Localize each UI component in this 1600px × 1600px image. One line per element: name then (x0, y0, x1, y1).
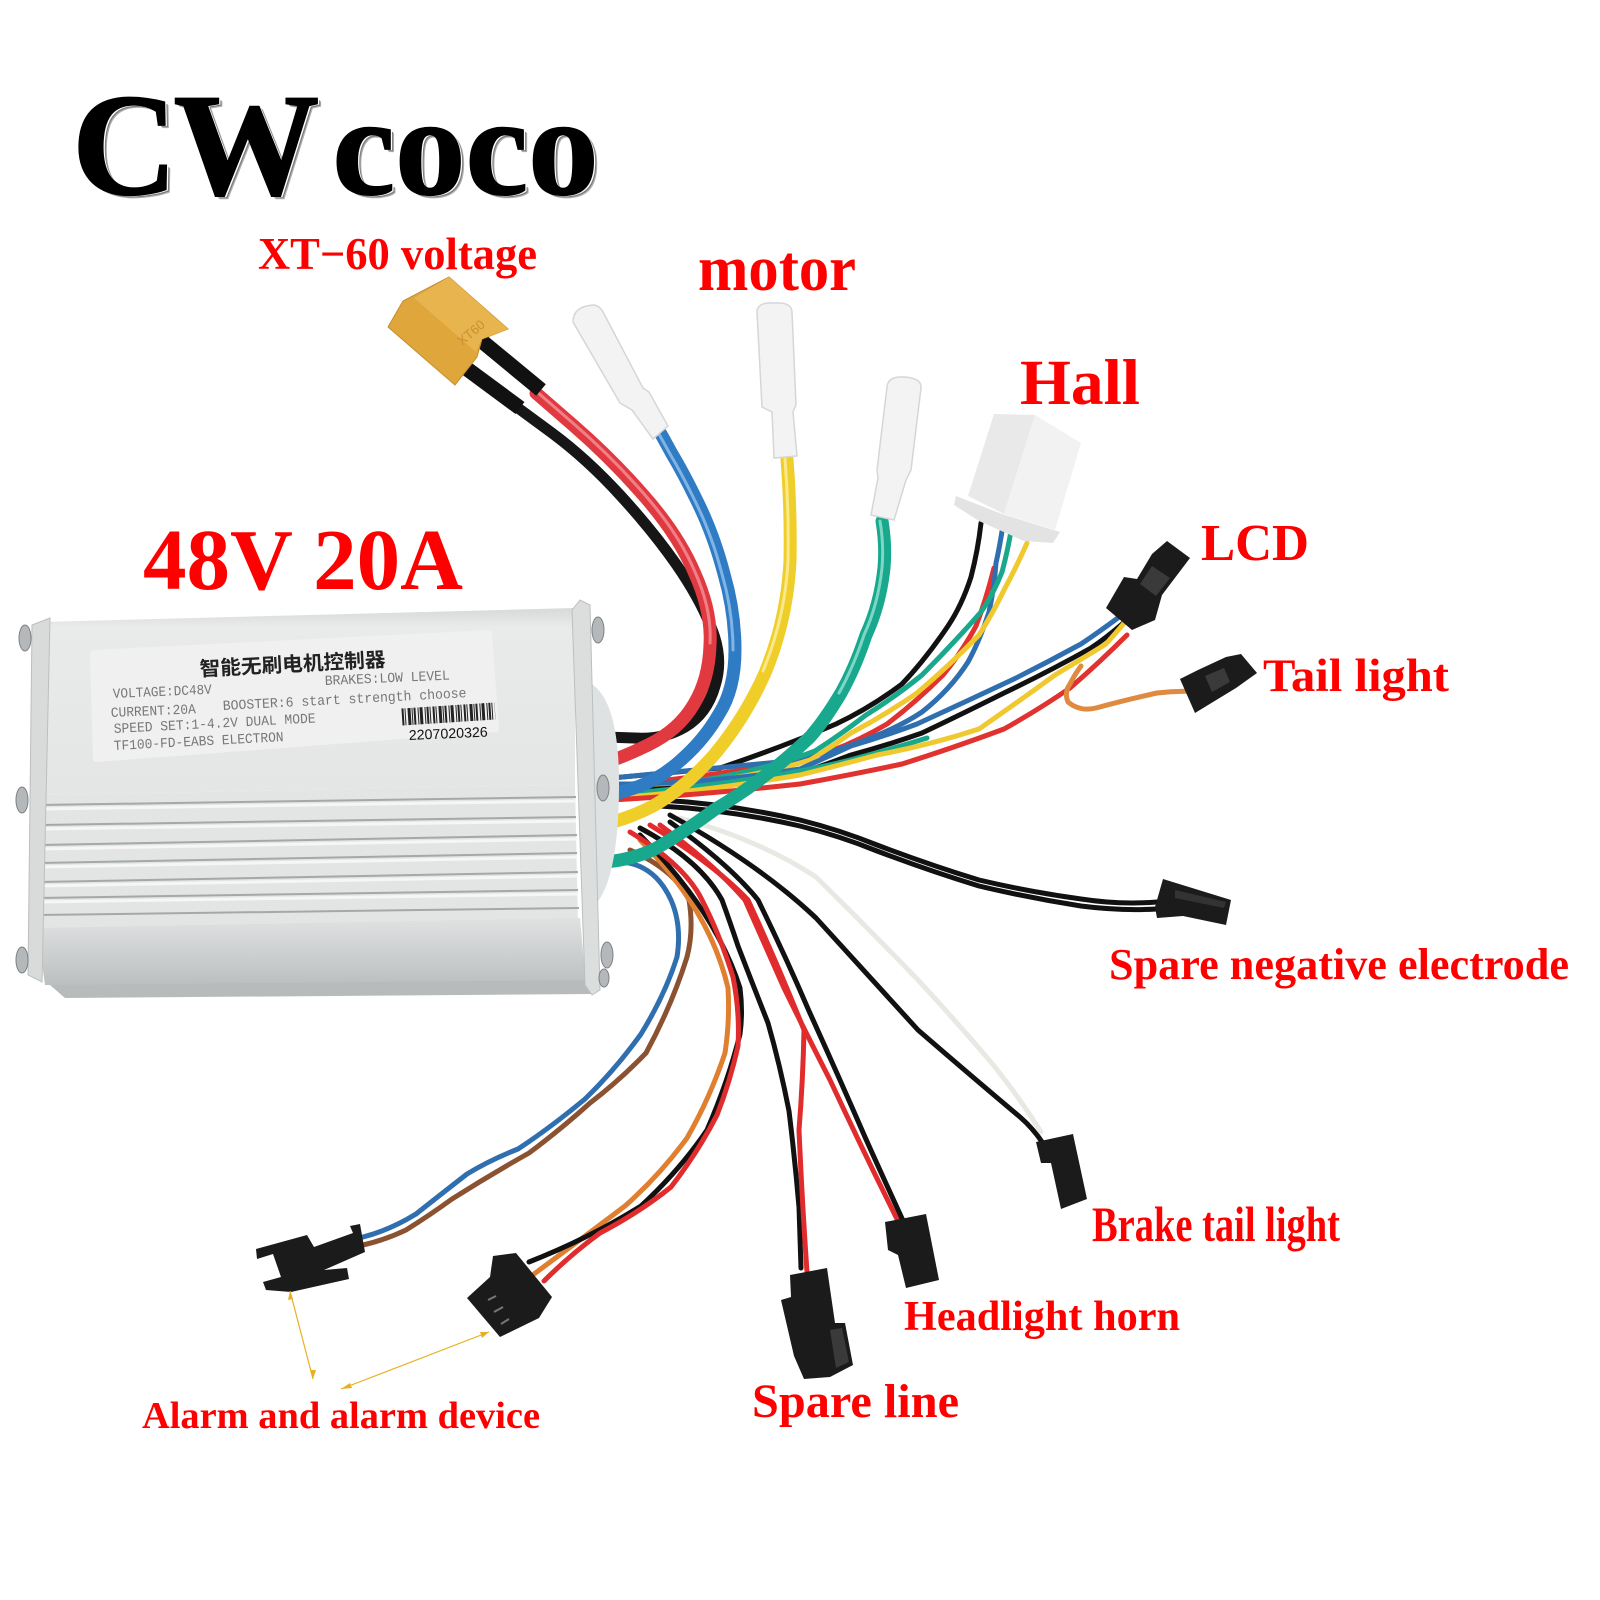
wires: XT-60 power (455, 338, 719, 762)
spec text: BOOSTER:6 start strength choose (222, 686, 467, 715)
finned heat sink (37, 785, 579, 935)
spec text: BRAKES:LOW LEVEL (325, 669, 450, 690)
wires: bottom bundle (363, 800, 1157, 1281)
wire: motor phase blue (605, 434, 735, 797)
connector: spare negative (1155, 879, 1231, 925)
label heading: 智能无刷电机控制器 (199, 648, 386, 681)
connector: headlight horn (885, 1214, 939, 1288)
label: motor: motor (698, 233, 856, 305)
lower face (37, 918, 586, 985)
wire: motor phase yellow (605, 459, 790, 824)
wires: right bundle (612, 523, 1203, 800)
connector: alarm 2 (467, 1253, 552, 1337)
connector: Hall (954, 414, 1081, 543)
label: Spare line: Spare line (752, 1375, 959, 1428)
wiring harness (363, 338, 1203, 1281)
label: 48V 20A: 48V 20A (143, 511, 463, 608)
right end plate (572, 600, 600, 995)
connector: brake tail light (1036, 1134, 1087, 1209)
serial number: 2207020326 (408, 724, 488, 743)
connector: alarm 1 (256, 1224, 365, 1292)
connector: motor bullet 1 (573, 305, 668, 439)
label: Hall: Hall (1020, 347, 1140, 419)
label: Spare negative electrode: Spare negative electrode (1109, 940, 1569, 989)
connector: XT-60: XT60 (454, 317, 488, 348)
spec text: SPEED SET:1-4.2V DUAL MODE (113, 711, 316, 738)
label: Tail light: Tail light (1263, 650, 1449, 702)
upper face (40, 608, 575, 795)
label: LCD: LCD (1201, 515, 1309, 572)
spec text: CURRENT:20A (111, 702, 197, 722)
spec text: TF100-FD-EABS ELECTRON (113, 730, 284, 755)
label: Brake tail light: Brake tail light (1092, 1196, 1340, 1252)
spec text: VOLTAGE:DC48V (113, 683, 213, 703)
callout arrows: alarm (288, 1291, 489, 1389)
title: CWcoco: CWcoco (72, 64, 599, 226)
connector: motor bullet 3 (871, 377, 921, 520)
connector: XT-60 (388, 277, 508, 385)
label: Alarm and alarm device: Alarm and alarm device (142, 1395, 540, 1437)
connector: spare line (781, 1268, 853, 1379)
label: XT-60 voltage: XT−60 voltage (258, 229, 537, 279)
label: Headlight horn: Headlight horn (904, 1294, 1180, 1340)
barcode (402, 711, 495, 717)
connector: motor bullet 2 (757, 303, 797, 458)
base strip (50, 980, 592, 998)
product label (93, 633, 496, 759)
connector: tail light (1180, 654, 1257, 713)
spec text (111, 669, 467, 755)
screws (16, 617, 613, 987)
gear cap (590, 683, 619, 905)
left end plate (28, 618, 50, 982)
controller body (16, 600, 619, 998)
connector: LCD (1106, 541, 1190, 630)
wire: motor phase green (605, 521, 885, 862)
